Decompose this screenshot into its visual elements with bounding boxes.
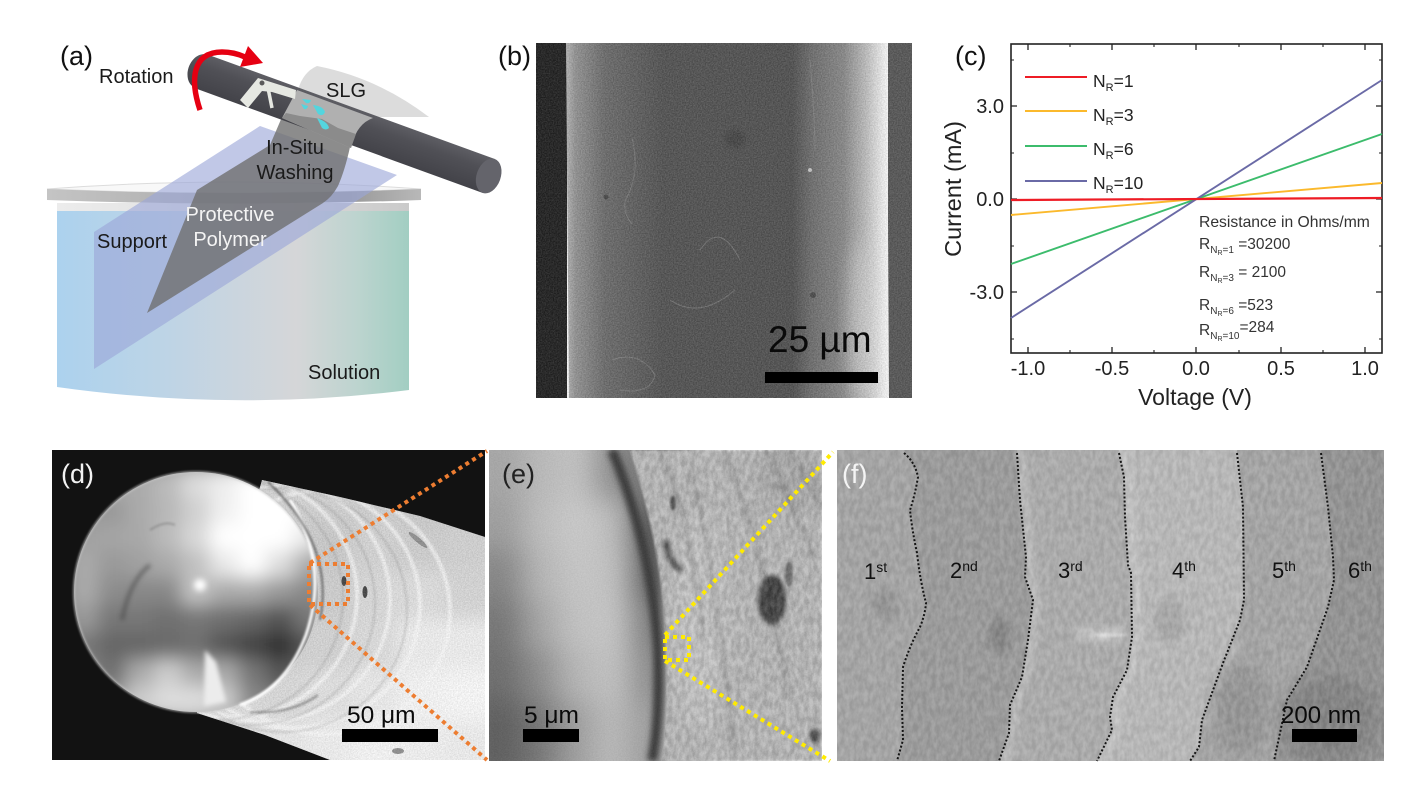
layer number labels: th <box>1284 558 1296 574</box>
layer number labels: th <box>1360 558 1372 574</box>
resistance annotation: R <box>1217 311 1222 318</box>
orange zoom box and guide lines <box>309 451 487 760</box>
schematic text labels: SLG <box>326 80 366 102</box>
resistance annotation: =30200 <box>1234 236 1291 253</box>
resistance annotation: R <box>1199 322 1210 339</box>
resistance annotation: Resistance in Ohms/mm <box>1199 214 1370 231</box>
scale bar 25 um <box>765 319 878 383</box>
panel c: current voltage chart <box>940 41 1382 410</box>
x axis tick labels: -1.0 <box>1011 358 1045 380</box>
schematic text labels: In-Situ <box>266 137 324 159</box>
legend: N <box>1093 173 1106 193</box>
resistance annotation: =523 <box>1234 297 1273 314</box>
resistance annotation: =6 <box>1222 306 1234 317</box>
resistance annotation <box>1199 214 1370 343</box>
legend: =10 <box>1114 173 1144 193</box>
resistance annotation: N <box>1210 306 1217 317</box>
layer number labels: 6 <box>1348 558 1360 583</box>
resistance annotation: R <box>1199 264 1210 281</box>
yellow zoom box and guide lines <box>665 452 833 761</box>
resistance annotation: R <box>1199 236 1210 253</box>
legend: N <box>1093 139 1106 159</box>
plot frame and ticks <box>1011 44 1382 353</box>
resistance annotation: N <box>1210 331 1217 342</box>
label d: (d) <box>61 459 94 489</box>
panel e: magnified edge micrograph <box>489 450 834 763</box>
schematic text labels: Rotation <box>99 66 174 88</box>
x axis tick labels: -0.5 <box>1095 358 1129 380</box>
legend: N <box>1093 71 1106 91</box>
scale bar 50 um: 50 μm <box>347 702 416 729</box>
scale bar 5 um: 5 μm <box>524 702 579 729</box>
schematic text labels: Polymer <box>193 229 267 251</box>
resistance annotation: R <box>1217 278 1222 285</box>
layer number labels: nd <box>962 558 978 574</box>
scale bar 25 um: 25 µm <box>768 319 872 360</box>
x axis title: Voltage (V) <box>1138 384 1252 410</box>
resistance annotation: = 2100 <box>1234 264 1286 281</box>
resistance annotation: N <box>1210 245 1217 256</box>
layer number labels: 1 <box>864 559 876 584</box>
rotation arrow <box>195 46 263 110</box>
fibre rod <box>183 50 506 197</box>
label c: (c) <box>955 41 986 71</box>
resistance annotation: R <box>1217 336 1222 343</box>
solution beaker <box>57 203 409 400</box>
resistance annotation: =1 <box>1222 245 1234 256</box>
label b: (b) <box>498 41 531 71</box>
label e: (e) <box>502 459 535 489</box>
rim of end face <box>74 472 323 712</box>
x axis tick labels: 0.5 <box>1267 358 1295 380</box>
label a: (a) <box>60 41 93 71</box>
legend: N <box>1093 105 1106 125</box>
SEM layers image <box>837 450 1384 765</box>
scale bar 50 um <box>342 702 438 742</box>
legend <box>1025 71 1144 196</box>
SEM micrograph <box>536 43 912 400</box>
x axis tick labels: 0.0 <box>1182 358 1210 380</box>
layer number labels: 3 <box>1058 558 1070 583</box>
y axis tick labels: 0.0 <box>976 189 1004 211</box>
resistance annotation: =3 <box>1222 273 1234 284</box>
legend: =1 <box>1114 71 1134 91</box>
resistance annotation: R <box>1217 250 1222 257</box>
support sheet <box>94 126 397 369</box>
schematic text labels: Support <box>97 231 167 253</box>
x axis tick labels <box>1011 358 1379 380</box>
y axis title: Current (mA) <box>940 121 966 257</box>
panel a: coating schematic <box>47 41 506 400</box>
SEM edge image <box>489 450 822 761</box>
legend: R <box>1106 150 1114 162</box>
panel f: layer boundaries micrograph <box>837 450 1384 765</box>
y axis tick labels: -3.0 <box>970 282 1004 304</box>
fibre body <box>197 480 485 760</box>
protective polymer ribbon <box>147 117 350 313</box>
layer number labels: 4 <box>1172 558 1184 583</box>
x axis tick labels: 1.0 <box>1351 358 1379 380</box>
layer number labels: 5 <box>1272 558 1284 583</box>
legend: R <box>1106 116 1114 128</box>
layer boundary lines <box>897 453 1334 761</box>
panel b: SEM fibre image <box>498 41 912 400</box>
scale bar 5 um <box>523 702 579 742</box>
schematic text labels <box>97 66 380 384</box>
layer number labels: 2 <box>950 558 962 583</box>
beaker lid <box>47 182 421 204</box>
data lines <box>1011 80 1382 318</box>
scale bar 200 nm <box>1281 702 1361 742</box>
legend: =6 <box>1114 139 1134 159</box>
film wrapped on rod <box>282 90 373 148</box>
y axis tick labels: 3.0 <box>976 96 1004 118</box>
resistance annotation: N <box>1210 273 1217 284</box>
water droplets <box>301 99 329 130</box>
legend: R <box>1106 184 1114 196</box>
resistance annotation: R <box>1199 297 1210 314</box>
panel d: fibre end view micrograph <box>52 449 488 762</box>
resistance annotation: =284 <box>1239 319 1275 336</box>
SLG sheet <box>298 66 429 117</box>
SEM end view image <box>52 450 485 760</box>
y axis tick labels <box>970 96 1004 304</box>
resistance annotation: =10 <box>1222 331 1240 342</box>
gripper tool <box>240 78 296 108</box>
scale bar 200 nm: 200 nm <box>1281 702 1361 729</box>
label f: (f) <box>842 459 867 489</box>
legend: =3 <box>1114 105 1134 125</box>
schematic text labels: Solution <box>308 362 380 384</box>
layer number labels <box>864 558 1372 584</box>
layer number labels: st <box>876 559 887 575</box>
schematic text labels: Washing <box>256 162 334 184</box>
layer number labels: rd <box>1070 558 1083 574</box>
layer number labels: th <box>1184 558 1196 574</box>
legend: R <box>1106 82 1114 94</box>
schematic text labels: Protective <box>186 204 274 226</box>
fibre end face <box>74 472 318 712</box>
